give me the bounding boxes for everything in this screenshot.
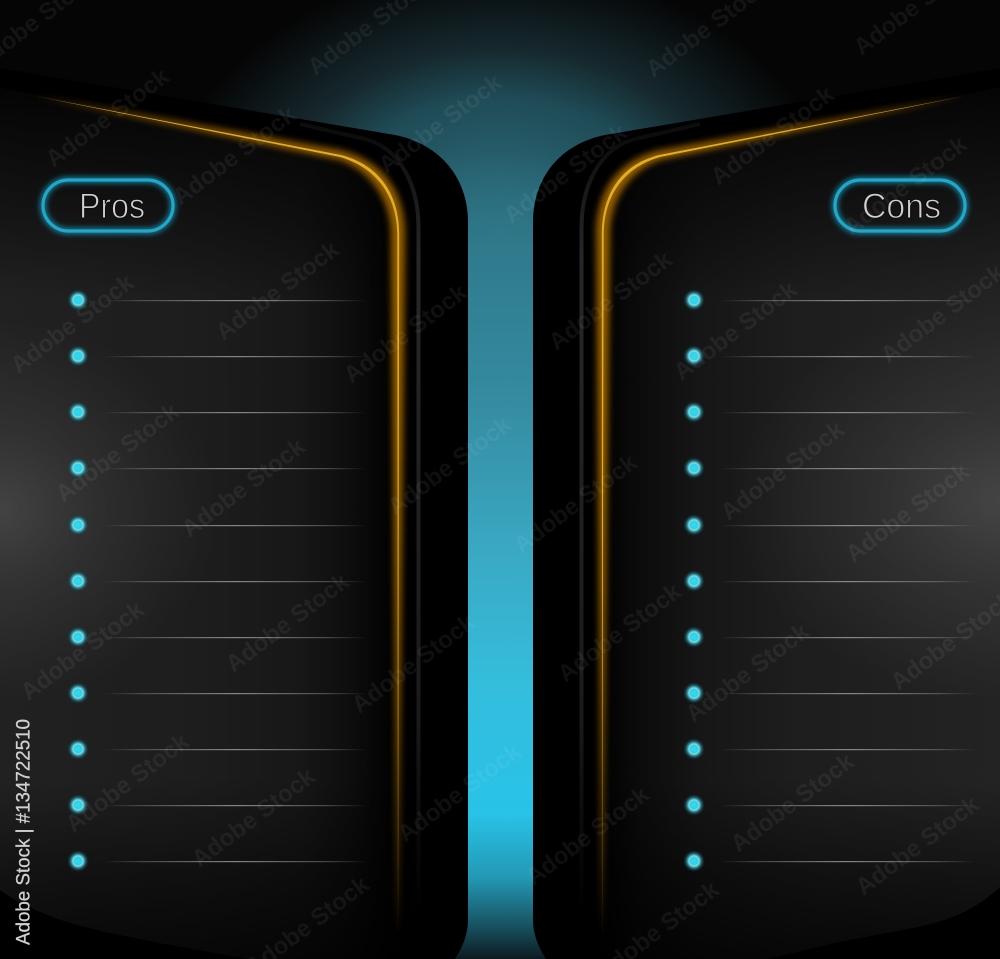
stock watermarks: Adobe Stock — [499, 119, 633, 229]
stock watermarks: Adobe Stock — [521, 781, 655, 891]
stock watermarks: Adobe Stock — [706, 81, 840, 191]
stock watermarks: Adobe Stock — [839, 131, 973, 241]
stock watermarks: Adobe Stock — [509, 449, 643, 559]
stock watermarks: Adobe Stock — [187, 763, 321, 873]
panel: cons — [533, 68, 1000, 959]
stock watermarks: Adobe Stock — [851, 791, 985, 901]
stock id caption: Adobe Stock | #134722510 — [14, 719, 34, 945]
stock watermarks: Adobe Stock — [726, 748, 860, 858]
stock watermarks: Adobe Stock — [393, 738, 527, 848]
inner edge line: cons — [582, 124, 700, 910]
panel sheet: pros — [0, 88, 398, 959]
stock watermarks: Adobe Stock — [221, 568, 355, 678]
inner edge line: pros — [300, 124, 418, 910]
panel: pros — [0, 68, 468, 959]
stock watermarks: Adobe Stock — [177, 433, 311, 543]
list: cons bullets and rules — [683, 289, 976, 872]
stock watermarks: Adobe Stock — [339, 279, 473, 389]
stock watermarks: Adobe Stock — [544, 246, 678, 356]
badge: Pros — [43, 180, 173, 231]
stock watermarks: Adobe Stock — [669, 276, 803, 386]
stock watermarks: Adobe Stock — [168, 101, 302, 211]
stock watermarks: Adobe Stock — [41, 63, 175, 173]
accent line: pros — [35, 96, 405, 938]
panel shell: pros — [0, 68, 468, 959]
badge: Cons — [835, 180, 965, 231]
stock watermarks: Adobe Stock — [716, 416, 850, 526]
stock watermarks: Adobe Stock — [51, 398, 185, 508]
panel sheet: cons — [602, 88, 1000, 959]
stock watermarks: Adobe Stock — [347, 609, 481, 719]
list: pros bullets and rules — [67, 289, 367, 872]
stock watermarks: Adobe Stock — [553, 578, 687, 688]
stock watermarks: Adobe Stock — [383, 411, 517, 521]
stock watermarks: Adobe Stock — [374, 69, 508, 179]
accent line: cons — [596, 96, 965, 938]
stock watermarks: Adobe Stock — [211, 236, 345, 346]
stock watermarks: Adobe Stock — [841, 458, 975, 568]
stock watermarks: Adobe Stock — [61, 728, 195, 838]
stock watermarks: Adobe Stock — [681, 618, 815, 728]
stock watermarks: Adobe Stock — [6, 269, 140, 379]
stock watermarks: Adobe Stock — [16, 596, 150, 706]
badge: Cons: Cons — [862, 187, 941, 226]
badge: Pros: Pros — [79, 187, 145, 226]
panel shell: cons — [533, 68, 1000, 959]
